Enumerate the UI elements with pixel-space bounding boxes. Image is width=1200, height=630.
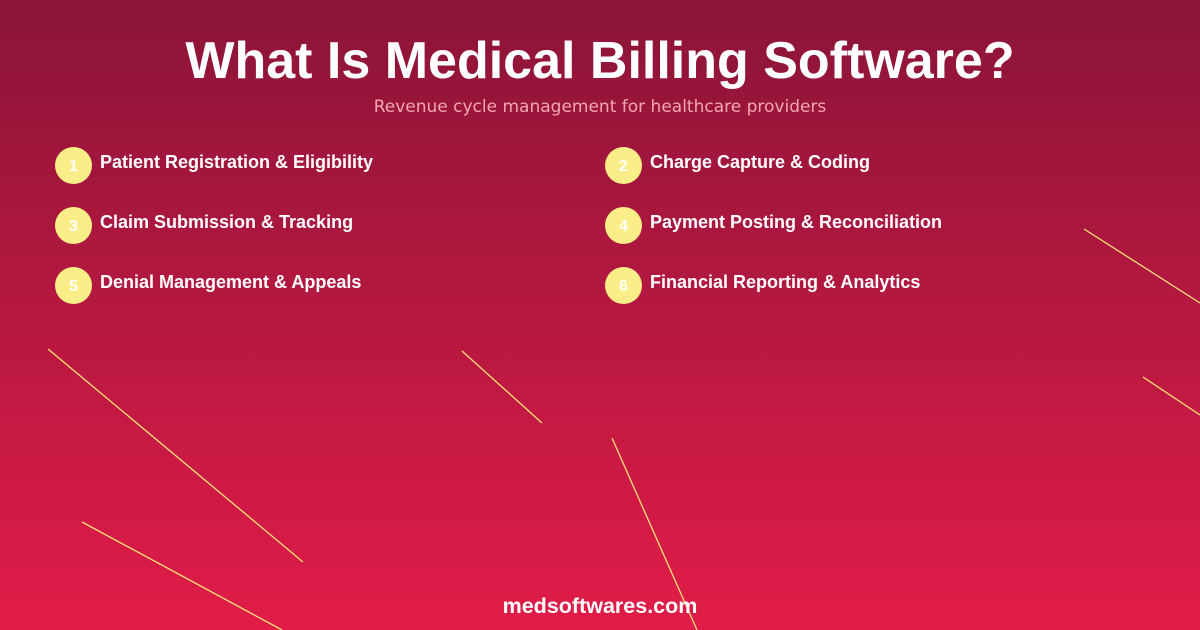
item 3 — [55, 207, 353, 244]
item 4: Payment Posting & Reconciliation — [650, 212, 942, 232]
item 4: 4 — [619, 218, 628, 235]
item 2: Charge Capture & Coding — [650, 152, 870, 172]
item 6 — [605, 267, 920, 304]
item 2: 2 — [619, 158, 628, 175]
item 5: 5 — [69, 278, 78, 295]
item 2 — [605, 147, 870, 184]
item 1: 1 — [69, 158, 78, 175]
item 4 — [605, 207, 942, 244]
subtitle: Revenue cycle management for healthcare providers — [374, 97, 826, 117]
item 6: 6 — [619, 278, 628, 295]
item 1 — [55, 147, 373, 184]
item 6: Financial Reporting & Analytics — [650, 272, 920, 292]
item 3: 3 — [69, 218, 78, 235]
item 3: Claim Submission & Tracking — [100, 212, 353, 232]
footer: medsoftwares.com — [503, 594, 697, 618]
title: What Is Medical Billing Software? — [185, 32, 1015, 90]
item 5 — [55, 267, 361, 304]
item 1: Patient Registration & Eligibility — [100, 152, 373, 172]
item 5: Denial Management & Appeals — [100, 272, 361, 292]
